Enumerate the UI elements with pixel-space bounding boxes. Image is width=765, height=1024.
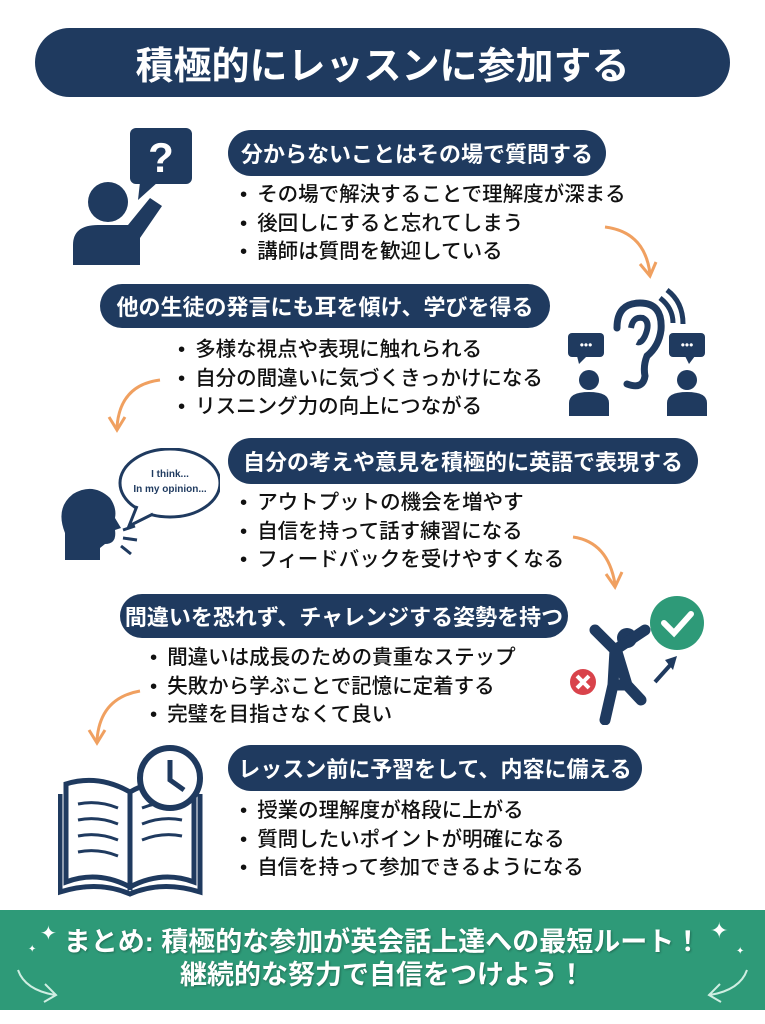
bullets 2: 自分の間違いに気づくきっかけになる — [195, 367, 543, 390]
arrow 1 — [604, 226, 658, 279]
bullets 3: アウトプットの機会を増やす — [257, 491, 524, 514]
summary text — [64, 927, 701, 990]
icon: ear and listeners: ••• — [681, 338, 693, 352]
bullets 5: 自信を持って参加できるようになる — [257, 856, 584, 879]
summary text: まとめ: 積極的な参加が英会話上達への最短ルート！ — [64, 927, 701, 957]
arrow 3 — [572, 536, 624, 590]
bullets 2: 多様な視点や表現に触れられる — [195, 338, 482, 361]
icon: person with question: ? — [148, 134, 174, 181]
sparkles and arrows — [17, 918, 748, 1003]
sparkles and arrows: ✦ — [28, 944, 36, 955]
icon: person with question — [73, 128, 192, 265]
icon: speaking head: I think... — [151, 469, 189, 480]
bullets 1: 講師は質問を歓迎している — [257, 240, 503, 263]
footer summary — [0, 910, 765, 1010]
heading 4: 間違いを恐れず、チャレンジする姿勢を持つ — [125, 605, 563, 630]
title: 積極的にレッスンに参加する — [135, 46, 630, 88]
heading 3 — [228, 438, 698, 484]
title — [35, 28, 730, 97]
bullets 4 — [150, 646, 516, 726]
bullets 1: 後回しにすると忘れてしまう — [257, 212, 523, 235]
bullets 5: 授業の理解度が格段に上がる — [257, 799, 524, 822]
icon: jumping person — [570, 596, 704, 725]
heading 5 — [228, 745, 642, 791]
summary text: 継続的な努力で自信をつけよう！ — [180, 960, 585, 990]
heading 1 — [228, 130, 606, 176]
icon: ear and listeners — [568, 288, 707, 416]
bullets 3: フィードバックを受けやすくなる — [257, 548, 564, 571]
icon: ear and listeners: ••• — [580, 338, 592, 352]
arrow 2 — [108, 378, 160, 433]
heading 4 — [120, 594, 568, 638]
bullets 4: 完璧を目指さなくて良い — [167, 703, 392, 726]
icon: speaking head: In my opinion... — [133, 484, 207, 495]
icon: book and clock — [58, 745, 203, 897]
bullets 1: その場で解決することで理解度が深まる — [257, 183, 626, 206]
bullets 1 — [240, 183, 626, 263]
bullets 5: 質問したいポイントが明確になる — [257, 828, 565, 851]
bullets 4: 失敗から学ぶことで記憶に定着する — [167, 675, 495, 698]
sparkles and arrows: ✦ — [710, 918, 728, 943]
sparkles and arrows: ✦ — [40, 923, 57, 945]
heading 1: 分からないことはその場で質問する — [241, 142, 593, 167]
bullets 5 — [240, 799, 584, 879]
heading 2 — [100, 284, 550, 328]
bullets 2: リスニング力の向上につながる — [195, 395, 482, 418]
bullets 3 — [240, 491, 564, 571]
bullets 2 — [178, 338, 543, 418]
bullets 4: 間違いは成長のための貴重なステップ — [167, 646, 516, 669]
icon: speaking head — [61, 448, 220, 560]
heading 2: 他の生徒の発言にも耳を傾け、学びを得る — [117, 295, 533, 320]
bullets 3: 自信を持って話す練習になる — [257, 520, 523, 543]
sparkles and arrows: ✦ — [736, 946, 744, 957]
arrow 4 — [88, 690, 140, 746]
heading 3: 自分の考えや意見を積極的に英語で表現する — [243, 450, 683, 475]
heading 5: レッスン前に予習をして、内容に備える — [238, 757, 632, 782]
